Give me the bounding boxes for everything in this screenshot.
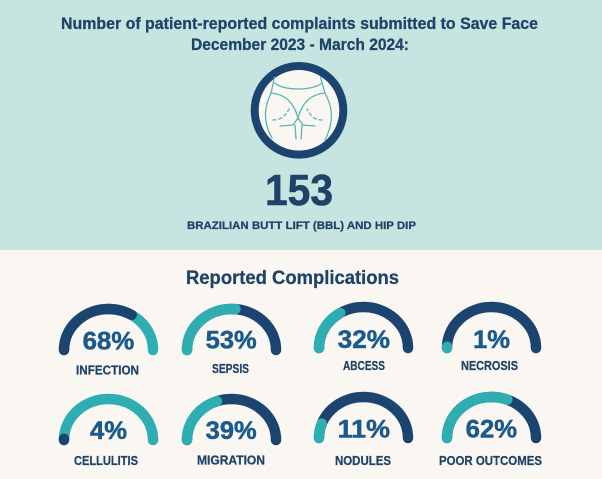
gauge: sepsis: 53% bbox=[206, 326, 257, 354]
gauge: sepsis bbox=[187, 309, 276, 376]
panel: header band bbox=[0, 0, 602, 250]
gauge: cellulitis: 4% bbox=[90, 417, 127, 445]
gauge: abcess: 32% bbox=[338, 326, 390, 354]
title: Number of patient-reported complaints submitted to Save Face bbox=[61, 14, 538, 33]
title: December 2023 - March 2024: bbox=[191, 35, 409, 54]
heading: reported complications: Reported Complications bbox=[186, 268, 399, 289]
gauge: cellulitis: CELLULITIS bbox=[74, 453, 138, 468]
gauge: cellulitis bbox=[64, 399, 153, 468]
gauge: nodules: 11% bbox=[338, 416, 390, 444]
gauge: necrosis: NECROSIS bbox=[461, 358, 518, 373]
label: BBL and hip dip: BRAZILIAN BUTT LIFT (BBL) AND HIP DIP bbox=[187, 220, 416, 232]
gauge: necrosis bbox=[447, 307, 536, 373]
gauge: abcess bbox=[319, 307, 408, 373]
gauge: infection bbox=[64, 309, 153, 377]
gauge: poor outcomes: 62% bbox=[466, 416, 517, 444]
gauge: migration: 39% bbox=[206, 417, 257, 445]
big number: 153: 153 bbox=[265, 166, 333, 215]
gauge: migration bbox=[187, 399, 276, 468]
icon: buttocks in circle bbox=[255, 66, 343, 155]
gauge: poor outcomes bbox=[439, 397, 542, 468]
gauge: poor outcomes: POOR OUTCOMES bbox=[439, 453, 542, 468]
gauge: migration: MIGRATION bbox=[197, 452, 265, 468]
gauge: infection: INFECTION bbox=[76, 362, 139, 377]
gauge: nodules bbox=[319, 397, 408, 468]
gauge: abcess: ABCESS bbox=[343, 358, 385, 373]
gauge: infection: 68% bbox=[83, 327, 134, 355]
panel: complications background bbox=[0, 250, 602, 479]
title bbox=[61, 14, 538, 54]
gauge: sepsis: SEPSIS bbox=[212, 361, 249, 376]
gauge: nodules: NODULES bbox=[335, 453, 391, 468]
gauge: necrosis: 1% bbox=[473, 326, 510, 354]
